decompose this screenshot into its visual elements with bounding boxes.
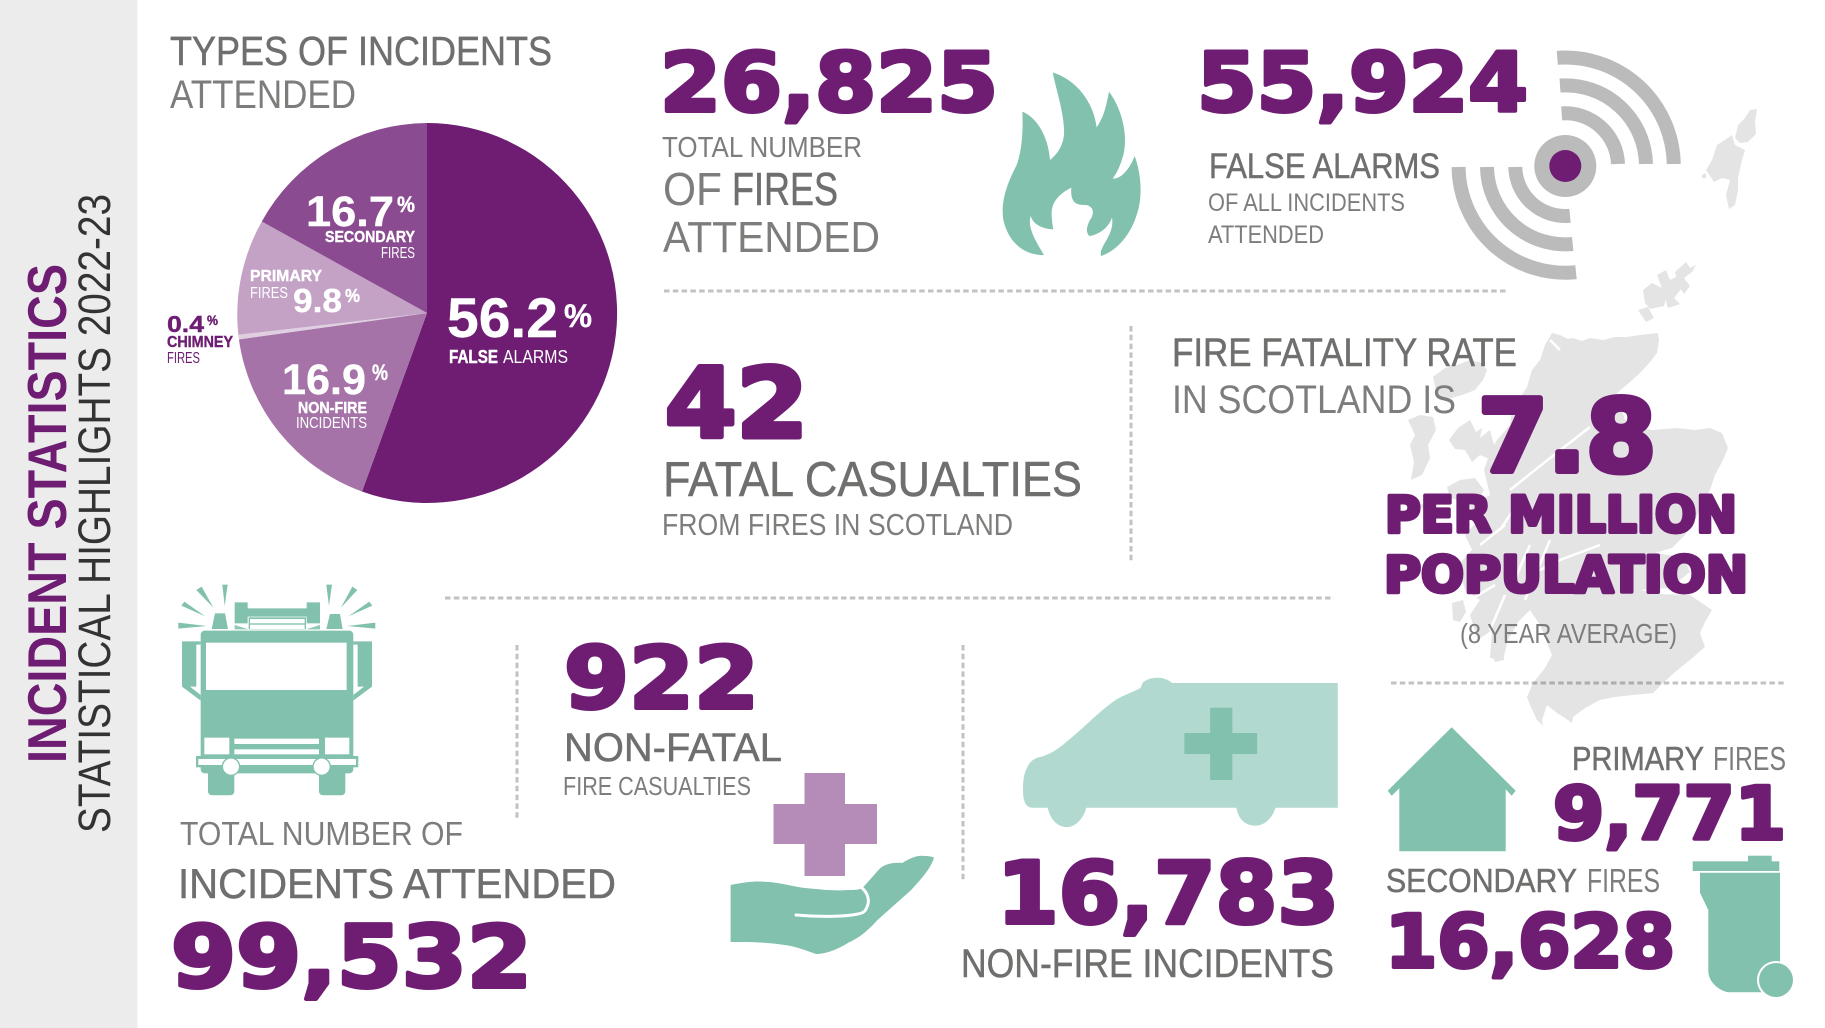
label: false alarms bbox=[447, 286, 592, 367]
label: chimney fires: FIRES bbox=[167, 350, 200, 367]
panel: types of incidents pie chart bbox=[167, 28, 617, 503]
label: chimney fires: 0.4 bbox=[167, 311, 204, 337]
panel: false alarms bbox=[1197, 37, 1674, 273]
divider: vertical dotted line centre bbox=[1130, 326, 1132, 562]
label: primary fires: FIRES bbox=[250, 285, 288, 302]
pie slices bbox=[237, 123, 617, 503]
label: false alarms: % bbox=[564, 298, 592, 334]
fires caption: ATTENDED bbox=[663, 213, 880, 262]
fires caption: OF bbox=[663, 163, 722, 215]
per million population: PER MILLION bbox=[1385, 486, 1737, 544]
sidebar title: INCIDENT STATISTICS bbox=[16, 264, 78, 763]
panel: non-fatal casualties bbox=[563, 629, 934, 954]
fatal casualties sub caption: FROM FIRES IN SCOTLAND bbox=[662, 507, 1013, 542]
stat: 99,532: 99,532 bbox=[171, 908, 532, 1008]
stat: 7.8: 7.8 bbox=[1478, 378, 1656, 495]
label: primary fires: PRIMARY bbox=[250, 268, 322, 285]
sidebar subtitle: STATISTICAL HIGHLIGHTS 2022-23 bbox=[69, 194, 120, 833]
divider: middle dotted line bbox=[445, 596, 1334, 600]
icon: house bbox=[1388, 727, 1516, 851]
label: non-fire incidents: 16.9 bbox=[282, 356, 366, 404]
stat: 55,924: 55,924 bbox=[1197, 37, 1528, 131]
icon: fire engine bbox=[178, 585, 375, 795]
label: primary fires: 9.8 bbox=[293, 282, 342, 319]
fires caption: FIRES bbox=[732, 163, 838, 215]
secondary fires caption: SECONDARY bbox=[1386, 862, 1577, 899]
divider: vertical dotted line right bbox=[962, 645, 964, 880]
label: secondary fires: 16.7 bbox=[306, 188, 394, 236]
pie heading: TYPES OF INCIDENTS bbox=[170, 28, 552, 74]
label: false alarms: FALSE bbox=[449, 347, 498, 367]
label: secondary fires: FIRES bbox=[381, 245, 415, 262]
label: chimney fires: CHIMNEY bbox=[167, 334, 233, 351]
label: chimney fires: % bbox=[207, 312, 218, 328]
false alarms caption: FALSE ALARMS bbox=[1209, 147, 1440, 186]
panel: non-fire incidents bbox=[961, 678, 1339, 986]
false alarms caption: OF ALL INCIDENTS bbox=[1208, 189, 1405, 217]
label: non-fire incidents: % bbox=[372, 360, 388, 385]
label: chimney fires bbox=[167, 311, 233, 367]
panel: fire fatality rate bbox=[1172, 331, 1748, 649]
secondary fires caption: FIRES bbox=[1587, 862, 1660, 899]
non-fire caption: NON-FIRE INCIDENTS bbox=[961, 942, 1334, 986]
map of Scotland background bbox=[1408, 109, 1757, 726]
divider: vertical dotted line left bbox=[516, 645, 518, 819]
pie heading: ATTENDED bbox=[170, 73, 356, 117]
label: secondary fires: % bbox=[397, 192, 415, 217]
label: primary fires: % bbox=[345, 286, 360, 306]
fires caption: TOTAL NUMBER bbox=[662, 132, 862, 164]
incidents caption: INCIDENTS ATTENDED bbox=[178, 860, 616, 907]
fatality rate heading: IN SCOTLAND IS bbox=[1172, 378, 1456, 422]
label: non-fire incidents bbox=[282, 356, 388, 432]
per million population: POPULATION bbox=[1384, 546, 1748, 604]
panel: secondary fires bbox=[1385, 856, 1795, 999]
icon: wheelie bin bbox=[1693, 856, 1795, 999]
stat: 9,771: 9,771 bbox=[1553, 772, 1786, 857]
non-fatal caption: NON-FATAL bbox=[564, 726, 782, 770]
fires caption bbox=[662, 132, 880, 262]
primary fires caption: FIRES bbox=[1713, 740, 1786, 777]
panel: fatal casualties bbox=[662, 348, 1082, 542]
stat: 16,783: 16,783 bbox=[997, 844, 1339, 944]
pie heading bbox=[170, 28, 552, 117]
divider: top dotted line bbox=[664, 290, 1506, 292]
primary fires caption bbox=[1572, 740, 1786, 777]
label: secondary fires bbox=[306, 188, 415, 262]
panel: total incidents attended bbox=[171, 585, 616, 1008]
incidents caption: TOTAL NUMBER OF bbox=[180, 815, 463, 852]
icon: hand holding medical cross bbox=[731, 773, 934, 954]
non-fatal caption bbox=[563, 726, 782, 801]
non-fatal caption: FIRE CASUALTIES bbox=[563, 771, 751, 801]
panel: primary fires bbox=[1388, 727, 1786, 857]
icon: ambulance bbox=[1023, 678, 1338, 827]
fatality rate heading: FIRE FATALITY RATE bbox=[1172, 331, 1517, 375]
label: false alarms: ALARMS bbox=[503, 347, 568, 367]
icon: flame bbox=[1003, 72, 1141, 256]
primary fires caption: PRIMARY bbox=[1572, 740, 1704, 777]
panel: total fires attended bbox=[660, 37, 1141, 262]
label: primary fires bbox=[250, 268, 360, 319]
stat: 922: 922 bbox=[564, 629, 759, 729]
icon: alarm signal bbox=[1459, 58, 1674, 273]
fatal casualties caption: FATAL CASUALTIES bbox=[663, 453, 1082, 507]
label: false alarms: 56.2 bbox=[447, 286, 558, 349]
divider: right dotted line bbox=[1391, 682, 1787, 684]
fatality rate heading bbox=[1172, 331, 1517, 422]
stat: 16,628: 16,628 bbox=[1385, 900, 1675, 985]
false alarms caption: ATTENDED bbox=[1208, 221, 1324, 249]
stat: 26,825: 26,825 bbox=[660, 37, 998, 131]
sidebar: title band bbox=[0, 0, 138, 1028]
label: non-fire incidents: NON-FIRE bbox=[298, 400, 367, 417]
incidents caption bbox=[178, 815, 616, 907]
stat: 42: 42 bbox=[665, 348, 808, 460]
false alarms caption bbox=[1208, 147, 1440, 249]
average note: (8 YEAR AVERAGE) bbox=[1460, 618, 1677, 649]
per million population bbox=[1384, 486, 1748, 604]
label: secondary fires: SECONDARY bbox=[325, 229, 415, 246]
label: non-fire incidents: INCIDENTS bbox=[296, 415, 367, 432]
